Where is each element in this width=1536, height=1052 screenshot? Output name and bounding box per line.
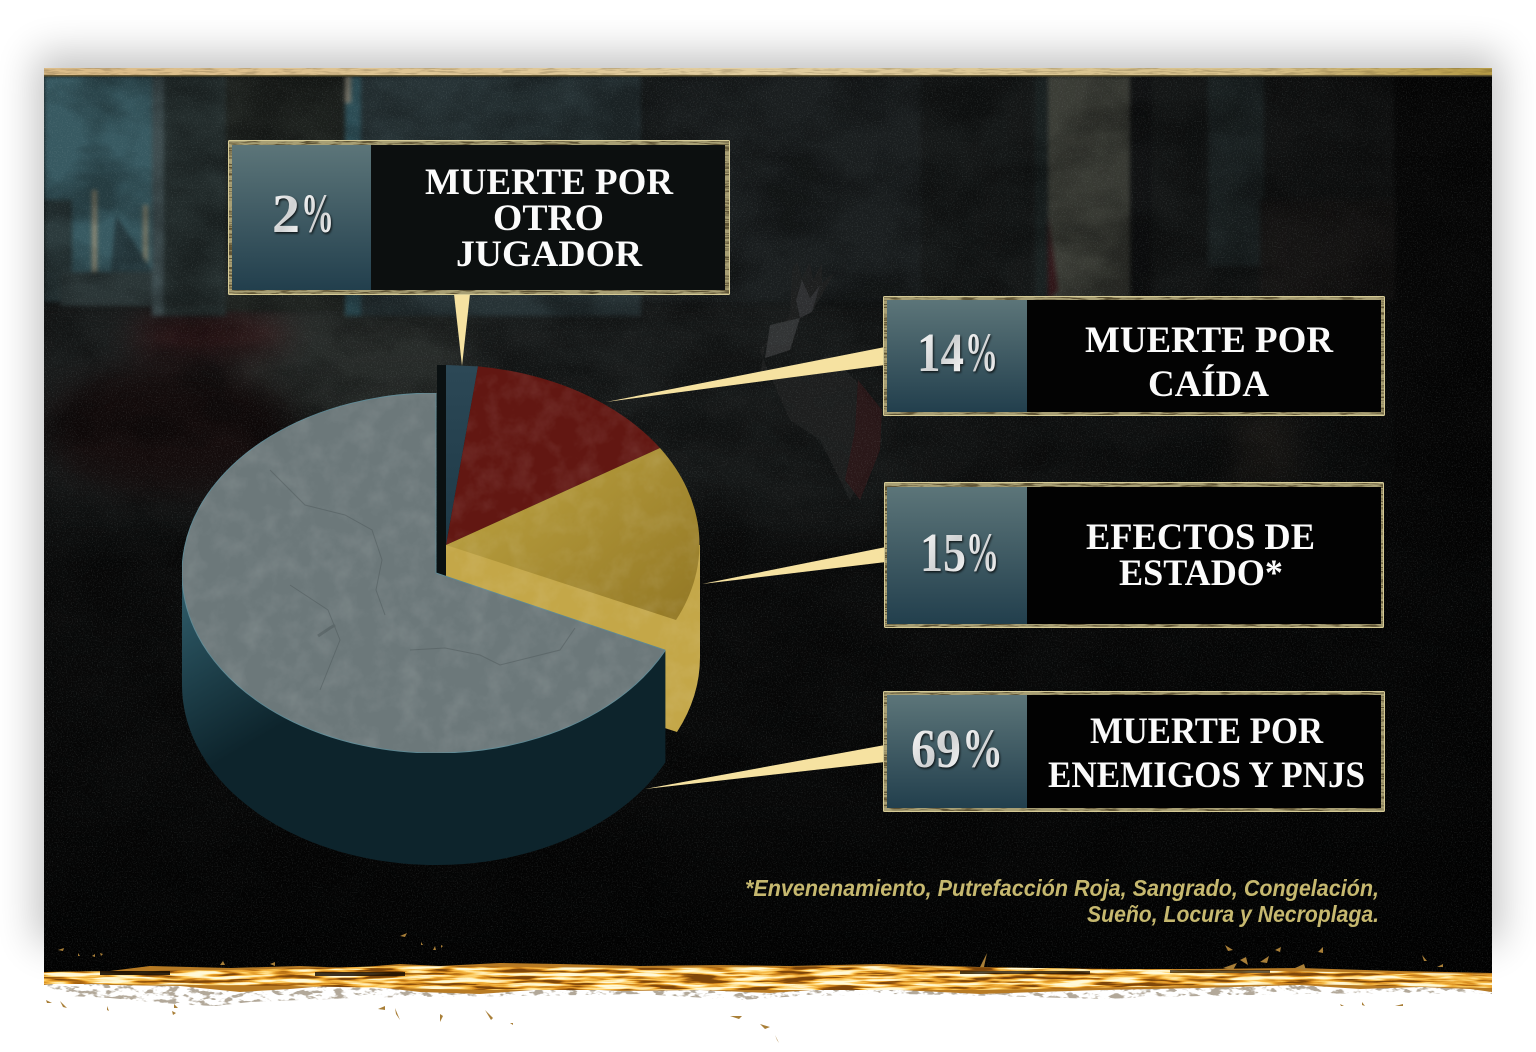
label: ESTADO* bbox=[1119, 553, 1283, 594]
percent value: 2 bbox=[272, 183, 300, 244]
slice: 69% side wall bbox=[182, 573, 665, 865]
callout: 69% muerte por enemigos y PNJs bbox=[884, 692, 1384, 812]
label: CAÍDA bbox=[1148, 363, 1269, 405]
frame bbox=[884, 296, 1384, 416]
pointer: 15% bbox=[702, 547, 886, 584]
frame bbox=[884, 482, 1384, 628]
slice: 15% gold wall bbox=[446, 545, 700, 732]
label bbox=[1085, 320, 1334, 405]
footnote: *Envenenamiento, Putrefacción Roja, Sangrado, Congelación, bbox=[745, 875, 1379, 901]
top gold border bbox=[44, 68, 1492, 76]
percent value: 15 bbox=[920, 522, 966, 583]
gold specks bbox=[46, 933, 1443, 1043]
percent value: 14 bbox=[917, 322, 964, 383]
pointer: 69% bbox=[645, 745, 885, 789]
text panel bbox=[887, 300, 1381, 412]
percent panel bbox=[887, 487, 1027, 624]
callout: 2% muerte por otro jugador bbox=[228, 140, 730, 294]
percent value bbox=[920, 522, 999, 583]
percent value bbox=[911, 718, 1003, 779]
label: EFECTOS DE bbox=[1086, 517, 1315, 558]
pointer: 14% bbox=[606, 347, 885, 402]
footnote bbox=[745, 875, 1379, 927]
label bbox=[425, 162, 674, 275]
label bbox=[1086, 517, 1315, 594]
percent value: % bbox=[962, 718, 1003, 779]
label: MUERTE POR bbox=[1085, 320, 1334, 361]
frame bbox=[228, 140, 730, 294]
percent value bbox=[917, 322, 998, 383]
label: JUGADOR bbox=[456, 234, 643, 275]
percent value: % bbox=[966, 522, 999, 583]
text panel bbox=[232, 145, 725, 290]
label: MUERTE POR bbox=[1090, 711, 1324, 752]
percent panel bbox=[232, 145, 371, 290]
slice: 69% grey top bbox=[182, 393, 665, 753]
callout: 14% muerte por caída bbox=[884, 296, 1384, 416]
callout pointers bbox=[454, 294, 886, 789]
percent value: 69 bbox=[911, 718, 961, 779]
label: MUERTE POR bbox=[425, 162, 674, 203]
percent value bbox=[272, 183, 334, 244]
knight figure in the background bbox=[760, 262, 882, 500]
gap behind the pie bbox=[437, 365, 446, 580]
slice: 2% blue bbox=[446, 365, 478, 545]
percent value: % bbox=[965, 322, 998, 383]
percent value: % bbox=[301, 183, 334, 244]
text panel bbox=[887, 487, 1381, 624]
surface cracks bbox=[270, 470, 575, 690]
3D pie chart bbox=[182, 365, 700, 865]
percent panel bbox=[887, 300, 1027, 412]
pointer: 2% bbox=[454, 294, 470, 366]
footnote: Sueño, Locura y Necroplaga. bbox=[1087, 901, 1379, 927]
callout: 15% efectos de estado bbox=[884, 482, 1384, 628]
slice: 15% gold top bbox=[446, 448, 699, 620]
torn gold bottom border bbox=[44, 963, 1492, 1006]
slice: 14% red bbox=[446, 366, 660, 545]
label: ENEMIGOS Y PNJS bbox=[1048, 755, 1365, 796]
text panel bbox=[887, 695, 1381, 808]
label: OTRO bbox=[493, 198, 604, 239]
frame bbox=[884, 692, 1384, 812]
percent panel bbox=[887, 695, 1027, 808]
label bbox=[1048, 711, 1365, 796]
